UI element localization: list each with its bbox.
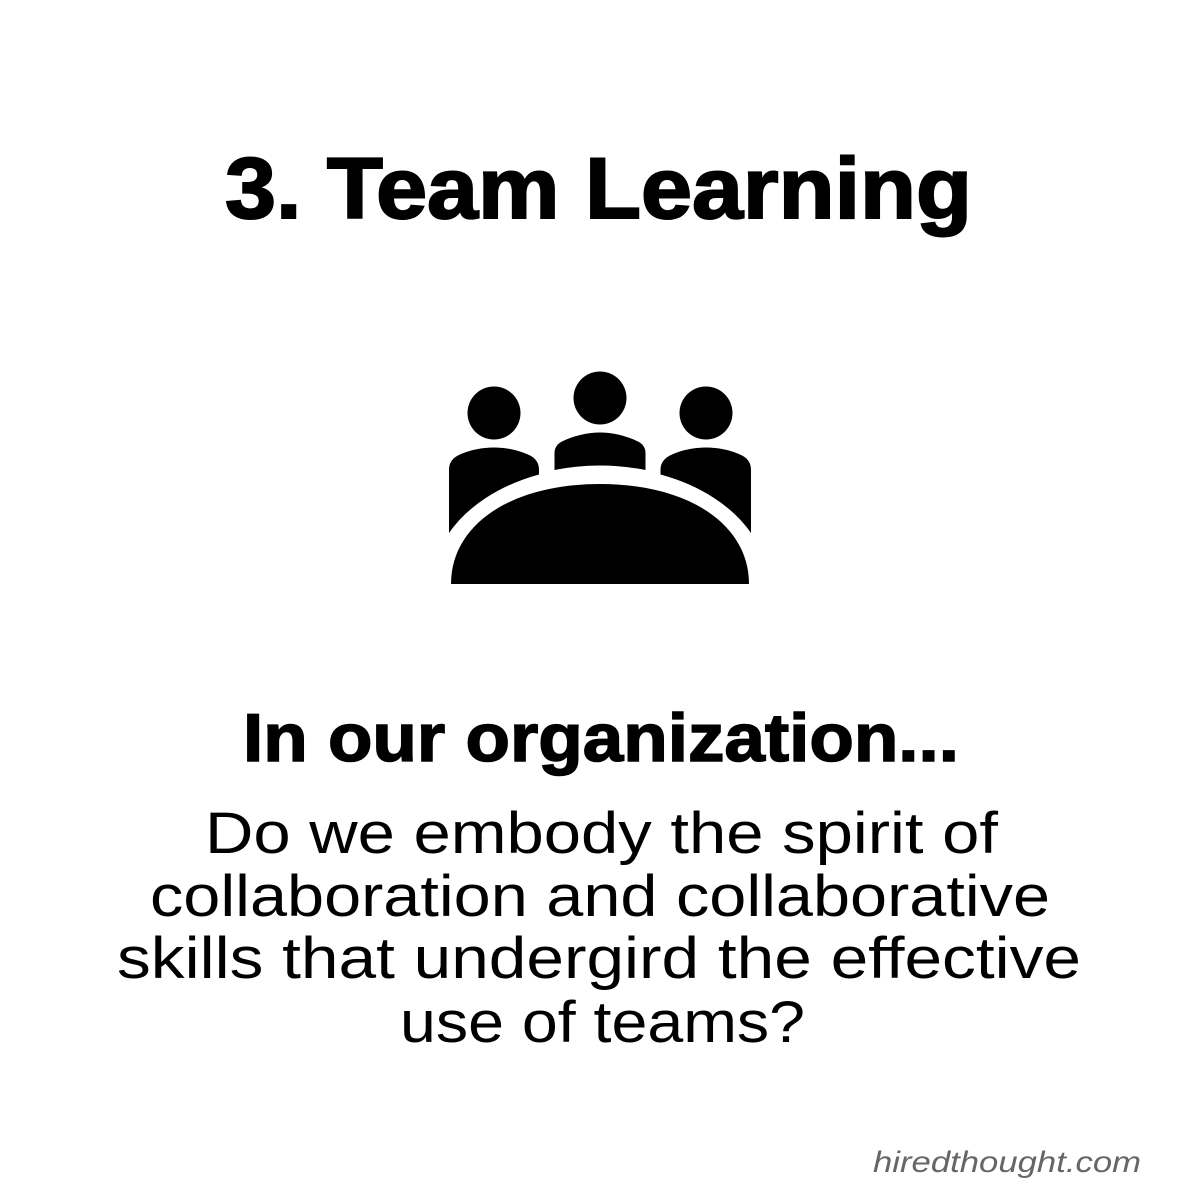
icon: left person [449,386,539,533]
body question text: collaboration and collaborative [150,864,1050,929]
body question text: use of teams? [400,990,805,1055]
body question text: skills that undergird the effective [117,926,1081,991]
body question text [117,801,1081,1055]
icon: right person [660,386,751,533]
icon: center person [554,372,646,470]
icon: team around a table [449,372,751,584]
icon: table [451,484,749,584]
subheading: In our organization... [243,700,959,776]
body question text: Do we embody the spirit of [205,801,999,866]
website credit: hiredthought.com [873,1146,1141,1179]
title: 3. Team Learning [225,141,972,237]
